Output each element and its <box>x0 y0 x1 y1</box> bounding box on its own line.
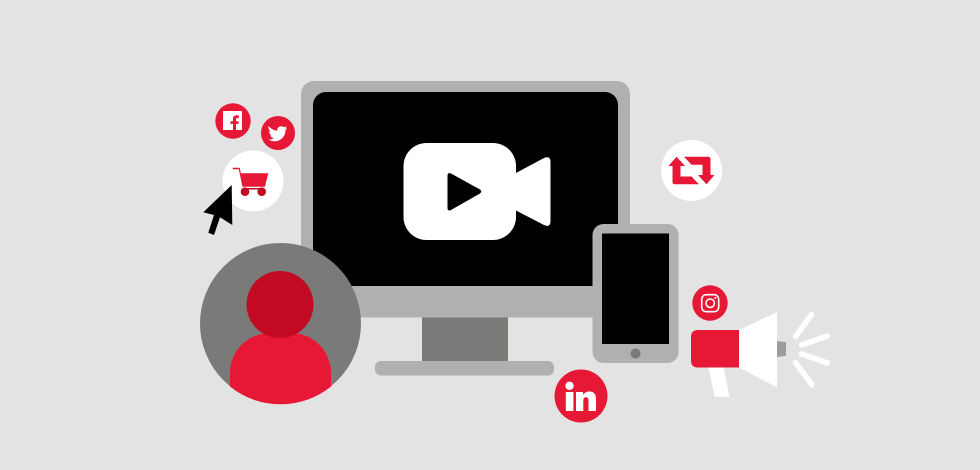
icon: instagram <box>692 285 728 321</box>
camera body <box>404 143 516 240</box>
megaphone tip <box>777 341 786 357</box>
megaphone grip <box>691 330 739 368</box>
avatar head <box>246 271 314 338</box>
cart basket <box>241 173 268 187</box>
smartphone <box>592 224 678 363</box>
desktop monitor <box>301 81 630 376</box>
icon: megaphone <box>691 312 828 397</box>
icon: video camera with play button <box>404 143 550 240</box>
play triangle <box>448 173 481 210</box>
phone body <box>592 224 678 363</box>
megaphone horn <box>739 312 777 388</box>
linkedin letter i <box>566 392 573 411</box>
icon: shopping cart <box>222 150 284 212</box>
cart circle <box>222 150 284 212</box>
avatar background <box>200 243 361 404</box>
linkedin dot <box>565 382 574 390</box>
icon: retweet <box>661 140 722 201</box>
icon: mouse cursor <box>203 185 232 235</box>
user avatar <box>200 243 361 404</box>
phone screen <box>602 234 669 344</box>
monitor body <box>301 81 630 318</box>
monitor stand neck <box>422 316 508 362</box>
monitor stand base <box>375 361 554 376</box>
monitor screen <box>313 92 618 286</box>
avatar body <box>230 333 331 404</box>
sound rays <box>796 314 828 385</box>
icon: facebook <box>215 103 251 139</box>
cart wheels <box>245 188 262 190</box>
cart handle <box>233 168 244 187</box>
linkedin letter n <box>576 392 596 411</box>
camera lens <box>515 157 550 226</box>
phone home button <box>630 348 640 358</box>
megaphone handle <box>708 366 729 397</box>
icon: twitter <box>261 116 295 150</box>
icon: linkedin <box>554 370 608 422</box>
